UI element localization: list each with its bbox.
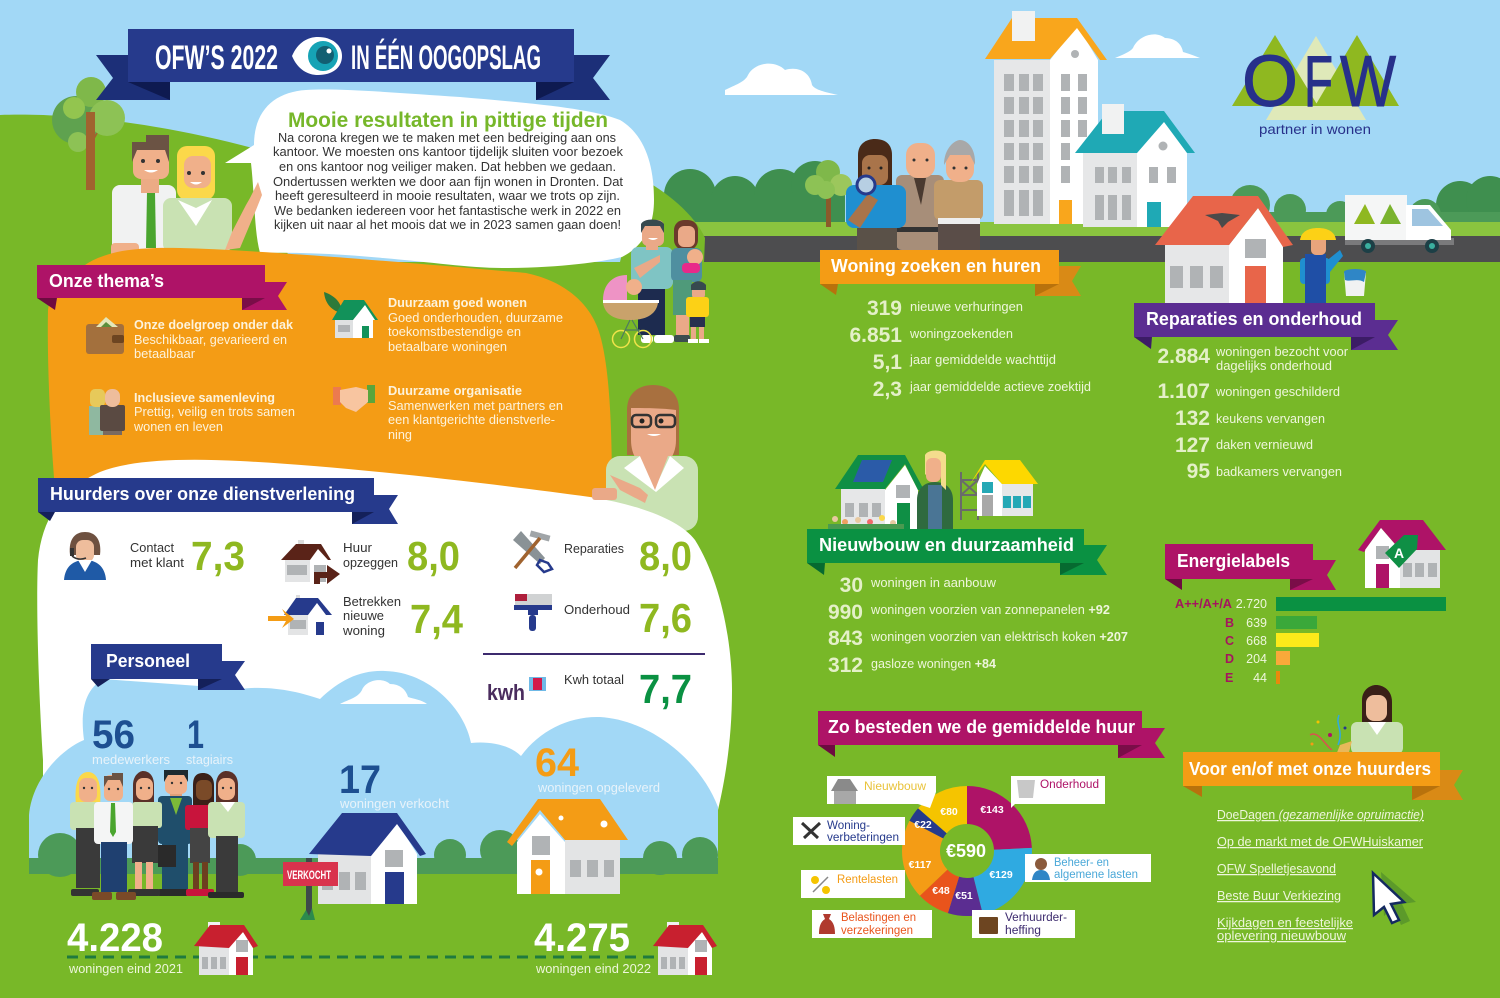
stat: woningen opgeleverd bbox=[535, 741, 660, 795]
stat: stagiairs: 1 bbox=[187, 713, 204, 757]
callout: Onderhoud bbox=[1011, 776, 1105, 808]
stat: stagiairs: stagiairs bbox=[186, 753, 233, 767]
text block: kijken uit naar al het moois dat we in 2023 samen gaan doen! bbox=[274, 218, 621, 232]
logo: OFW bbox=[1232, 35, 1399, 137]
panel: orange themes bbox=[48, 248, 612, 500]
theme: organisatie: Duurzame organisatie bbox=[388, 384, 522, 398]
chart: energy labels: 204 bbox=[1246, 652, 1267, 666]
icon: headset person bbox=[1032, 858, 1050, 880]
chart: energy labels: 2.720 bbox=[1236, 597, 1267, 611]
sign bbox=[283, 858, 338, 920]
theme: duurzaam wonen bbox=[324, 292, 563, 354]
stat: woningen opgeleverd: 64 bbox=[535, 741, 580, 785]
donut chart: rent spending: €80 bbox=[940, 806, 958, 818]
theme: organisatie: Samenwerken met partners en bbox=[388, 399, 563, 413]
illustration: woman with confetti bbox=[1310, 685, 1403, 756]
callout: Belastingen en verzekeringen: verzekeringen bbox=[841, 925, 913, 937]
score: onderhoud: 7,6 bbox=[639, 595, 692, 641]
stats: nieuwbouw: 30 bbox=[840, 574, 863, 597]
stats: woning zoeken: jaar gemiddelde wachttijd bbox=[909, 353, 1056, 367]
stat: woningen eind 2021: 4.228 bbox=[67, 916, 163, 960]
chart: energy labels: C bbox=[1225, 634, 1234, 648]
illustration: house under repair bbox=[1155, 196, 1293, 305]
stat: medewerkers: 56 bbox=[92, 713, 135, 757]
score: huur opzeggen bbox=[281, 533, 460, 584]
stat: medewerkers bbox=[92, 713, 170, 767]
stat: woningen eind 2021: woningen eind 2021 bbox=[68, 962, 183, 976]
stats: reparaties: 1.107 bbox=[1157, 380, 1210, 403]
text block: activities links bbox=[1217, 808, 1424, 943]
stats: reparaties: woningen bezocht voor bbox=[1215, 345, 1348, 359]
score: kwh totaal bbox=[483, 653, 705, 712]
illustration: new house bbox=[507, 799, 628, 894]
chart: energy labels: B bbox=[1225, 616, 1234, 630]
icon: house with entry arrow bbox=[268, 595, 332, 635]
icon: red house bbox=[194, 922, 258, 975]
text block: heeft geresulteerd in mooie resultaten, waar we trots op zijn. bbox=[275, 189, 620, 203]
stats: reparaties: keukens vervangen bbox=[1216, 412, 1325, 426]
stats: reparaties bbox=[1157, 345, 1348, 483]
callout: Woning-verbeteringen: Woning- bbox=[827, 820, 870, 832]
callout: Verhuurderheffing bbox=[972, 910, 1075, 938]
stats: woning zoeken: nieuwe verhuringen bbox=[910, 300, 1023, 314]
ribbon: Huurders over onze dienstverlening bbox=[38, 478, 398, 524]
theme: samenleving bbox=[89, 389, 295, 435]
cloud left bbox=[725, 64, 838, 95]
callout: Verhuurderheffing: heffing bbox=[1005, 925, 1041, 937]
callout: Onderhoud: Onderhoud bbox=[1040, 779, 1099, 791]
stats: nieuwbouw: gasloze woningen +84 bbox=[871, 657, 996, 671]
theme: duurzaam wonen: Goed onderhouden, duurzame bbox=[388, 311, 563, 325]
donut chart: rent spending bbox=[902, 786, 1032, 916]
callout: Rentelasten: Rentelasten bbox=[837, 874, 898, 886]
stat: woningen opgeleverd: woningen opgeleverd bbox=[537, 781, 660, 795]
banner: title bbox=[96, 29, 610, 100]
theme: duurzaam wonen: Duurzaam goed wonen bbox=[388, 296, 527, 310]
ribbon: Reparaties en onderhoud bbox=[1134, 303, 1398, 350]
stats: woning zoeken: 319 bbox=[867, 297, 902, 320]
theme: doelgroep bbox=[86, 317, 293, 361]
stat: woningen eind 2022 bbox=[534, 916, 717, 976]
text block: activities links: OFW Spelletjesavond bbox=[1217, 862, 1336, 876]
illustration: small tree bbox=[805, 160, 852, 227]
ribbon: Energielabels: Energielabels bbox=[1177, 551, 1290, 571]
logo: OFW: O bbox=[1242, 42, 1298, 122]
icon: house with A label bbox=[1358, 520, 1446, 588]
icon: handshake bbox=[333, 385, 375, 412]
stats: reparaties: dagelijks onderhoud bbox=[1216, 359, 1332, 373]
icon: kwh logo: kwh bbox=[487, 680, 525, 705]
theme: duurzaam wonen: toekomstbestendige en bbox=[388, 325, 521, 339]
text block: en ons kantoor nog veiliger maken. Dat hebben we gedaan. bbox=[279, 160, 616, 174]
logo: OFW: partner in wonen bbox=[1259, 121, 1371, 137]
stats: nieuwbouw: woningen voorzien van elektrisch koken +207 bbox=[870, 630, 1128, 644]
chart: energy labels: E bbox=[1225, 671, 1233, 685]
theme: organisatie bbox=[333, 384, 563, 442]
illustration: couple bbox=[111, 135, 262, 261]
text block: Ondertussen werkten we door aan fijn wonen in Dronten. Dat bbox=[273, 175, 624, 189]
donut chart: rent spending: €143 bbox=[980, 804, 1004, 816]
donut chart: rent spending: €129 bbox=[989, 869, 1013, 881]
illustration: van bbox=[1345, 195, 1454, 253]
donut chart: rent spending: €117 bbox=[909, 859, 932, 871]
panel: speech bubble bbox=[225, 90, 654, 268]
stats: nieuwbouw: 990 bbox=[828, 601, 863, 624]
donut chart: rent spending: €590 bbox=[946, 841, 986, 861]
text block: We bedanken iedereen voor het fantastische werk in 2022 en bbox=[274, 204, 621, 218]
icon: eye bbox=[292, 37, 342, 75]
ribbon: Voor en/of met onze huurders bbox=[1183, 752, 1463, 800]
stat: woningen eind 2021 bbox=[67, 916, 258, 976]
text block: activities links: Beste Buur Verkiezing bbox=[1217, 889, 1341, 903]
stats: nieuwbouw bbox=[828, 574, 1128, 677]
ribbon: Onze thema's bbox=[37, 265, 287, 310]
heading: Mooie resultaten in pittige tijden bbox=[288, 109, 608, 132]
ribbon: Nieuwbouw en duurzaamheid: Nieuwbouw en duurzaamheid bbox=[819, 535, 1074, 555]
stat: stagiairs bbox=[186, 713, 233, 767]
icon: fist on panel bbox=[592, 488, 617, 500]
ribbon: Woning zoeken en huren: Woning zoeken en huren bbox=[831, 256, 1041, 276]
ribbon: Zo besteden we de gemiddelde huur: Zo besteden we de gemiddelde huur bbox=[828, 717, 1135, 737]
theme: organisatie: een klantgerichte dienstverle- bbox=[388, 413, 555, 427]
score: reparaties: 8,0 bbox=[639, 533, 692, 579]
stats: nieuwbouw: 312 bbox=[828, 654, 863, 677]
ribbon: Personeel: Personeel bbox=[106, 651, 190, 671]
icon: mouse cursor bbox=[1373, 872, 1416, 925]
chart: energy labels: 44 bbox=[1253, 671, 1267, 685]
ribbon: Personeel bbox=[91, 644, 245, 690]
illustration: staff group bbox=[70, 770, 245, 900]
illustration: woman with glasses bbox=[606, 385, 698, 531]
illustration: sustainable houses bbox=[828, 450, 1038, 530]
title text right: IN ÉÉN OOGOPSLAG bbox=[351, 39, 541, 77]
text block: kantoor. We moesten ons kantoor tijdelijk sluiten voor bezoek bbox=[273, 145, 624, 159]
ribbon: Reparaties en onderhoud: Reparaties en onderhoud bbox=[1146, 309, 1362, 329]
theme: doelgroep: Onze doelgroep onder dak bbox=[134, 318, 293, 332]
icon: house with A label: A bbox=[1394, 545, 1404, 561]
callout: Beheer- en algemene lasten bbox=[1025, 854, 1151, 882]
score: onderhoud: Onderhoud bbox=[564, 603, 630, 617]
text block: activities links: DoeDagen (gezamenlijke opruimactie) bbox=[1217, 808, 1424, 822]
logo: OFW: F bbox=[1304, 42, 1333, 122]
stats: nieuwbouw: woningen in aanbouw bbox=[870, 576, 997, 590]
donut chart: rent spending: €51 bbox=[955, 890, 973, 902]
theme: duurzaam wonen: betaalbare woningen bbox=[388, 340, 507, 354]
score: contact met klant bbox=[64, 532, 245, 580]
icon: money bag bbox=[819, 914, 835, 934]
score: huur opzeggen: 8,0 bbox=[407, 533, 460, 579]
cloud right bbox=[1115, 34, 1200, 58]
ribbon: Huurders over onze dienstverlening: Huurders over onze dienstverlening bbox=[50, 484, 355, 504]
stats: reparaties: 127 bbox=[1175, 434, 1210, 457]
stats: woning zoeken bbox=[849, 297, 1091, 401]
ribbon: Woning zoeken en huren bbox=[820, 250, 1081, 296]
icon: house with exit arrow bbox=[281, 540, 340, 584]
text block: activities links: oplevering nieuwbouw bbox=[1217, 929, 1347, 943]
panel: personnel sky bbox=[29, 671, 718, 877]
title text left: OFW’S 2022 bbox=[155, 39, 278, 77]
text block: Na corona kregen we te maken met een bedreiging aan ons bbox=[278, 131, 616, 145]
score: kwh totaal: 7,7 bbox=[639, 666, 692, 712]
text block: activities links: Op de markt met de OFWHuiskamer bbox=[1217, 835, 1423, 849]
callout: Woning-verbeteringen: verbeteringen bbox=[827, 832, 899, 844]
callout: Belastingen en verzekeringen: Belastingen en bbox=[841, 912, 916, 924]
illustration: tall building bbox=[985, 11, 1107, 224]
score: contact met klant: Contact bbox=[130, 541, 175, 555]
score: contact met klant: met klant bbox=[130, 556, 185, 570]
icon: wallet bbox=[979, 917, 998, 934]
score: reparaties: Reparaties bbox=[564, 542, 624, 556]
callout: Belastingen en verzekeringen bbox=[812, 910, 932, 938]
icon: couple bbox=[89, 389, 125, 435]
callout: Nieuwbouw: Nieuwbouw bbox=[864, 781, 927, 793]
icon: paint brush bbox=[514, 594, 552, 631]
icon: percent coins bbox=[811, 876, 830, 894]
theme: samenleving: Inclusieve samenleving bbox=[134, 391, 275, 405]
stats: nieuwbouw: 843 bbox=[828, 627, 863, 650]
stat: woningen eind 2022: woningen eind 2022 bbox=[535, 962, 651, 976]
stat: woningen verkocht bbox=[339, 758, 450, 811]
icon: grey house bbox=[831, 779, 858, 804]
icon: paint can bbox=[1017, 780, 1035, 798]
callout: Beheer- en algemene lasten: algemene lasten bbox=[1054, 869, 1138, 881]
illustration: house seekers bbox=[846, 139, 983, 250]
theme: organisatie: ning bbox=[388, 428, 412, 442]
ribbon: Voor en/of met onze huurders: Voor en/of met onze huurders bbox=[1189, 759, 1431, 779]
icon: red house bbox=[653, 922, 717, 975]
score: betrekken nieuwe woning: nieuwe bbox=[343, 609, 384, 623]
score: betrekken nieuwe woning: Betrekken bbox=[343, 595, 401, 609]
callout: Nieuwbouw bbox=[827, 776, 936, 808]
stats: reparaties: 132 bbox=[1175, 407, 1210, 430]
logo: OFW: W bbox=[1340, 42, 1396, 122]
chart: energy labels: 668 bbox=[1246, 634, 1267, 648]
icon: headset woman bbox=[64, 532, 106, 580]
stats: reparaties: woningen geschilderd bbox=[1215, 385, 1340, 399]
score: betrekken nieuwe woning bbox=[268, 595, 463, 642]
donut chart: rent spending: €48 bbox=[932, 885, 950, 897]
stats: woning zoeken: jaar gemiddelde actieve zoektijd bbox=[909, 380, 1091, 394]
illustration: teal house bbox=[1075, 104, 1195, 227]
stats: woning zoeken: woningzoekenden bbox=[909, 327, 1013, 341]
illustration: family bbox=[603, 220, 709, 348]
stat: woningen eind 2022: 4.275 bbox=[534, 916, 630, 960]
text block bbox=[273, 131, 624, 232]
stat: medewerkers: medewerkers bbox=[92, 753, 170, 767]
score: contact met klant: 7,3 bbox=[191, 533, 245, 579]
score: kwh totaal: Kwh totaal bbox=[564, 673, 624, 687]
text block: activities links: Kijkdagen en feestelijke bbox=[1217, 916, 1353, 930]
callout: Beheer- en algemene lasten: Beheer- en bbox=[1054, 857, 1109, 869]
ribbon: Onze thema's: Onze thema’s bbox=[49, 271, 164, 291]
icon: kwh logo bbox=[487, 677, 546, 705]
stat: woningen verkocht: woningen verkocht bbox=[339, 797, 450, 811]
stats: reparaties: 95 bbox=[1187, 460, 1210, 483]
score: huur opzeggen: opzeggen bbox=[343, 556, 398, 570]
ribbon: Energielabels bbox=[1165, 544, 1336, 590]
stats: reparaties: badkamers vervangen bbox=[1216, 465, 1342, 479]
icon: green house with leaf bbox=[324, 292, 378, 338]
stats: reparaties: daken vernieuwd bbox=[1216, 438, 1313, 452]
stats: woning zoeken: 6.851 bbox=[849, 324, 902, 347]
stats: nieuwbouw: woningen voorzien van zonnepanelen +92 bbox=[870, 603, 1110, 617]
theme: samenleving: wonen en leven bbox=[133, 420, 223, 434]
callout: Rentelasten bbox=[801, 870, 905, 898]
callout: Verhuurderheffing: Verhuurder- bbox=[1005, 912, 1067, 924]
theme: samenleving: Prettig, veilig en trots samen bbox=[134, 405, 295, 419]
ribbon: Zo besteden we de gemiddelde huur bbox=[818, 711, 1165, 758]
score: betrekken nieuwe woning: woning bbox=[342, 624, 385, 638]
tree left bbox=[52, 77, 125, 190]
stats: reparaties: 2.884 bbox=[1157, 345, 1210, 368]
stat: woningen verkocht: 17 bbox=[339, 758, 381, 802]
donut chart: rent spending: €22 bbox=[914, 819, 932, 831]
chart: energy labels bbox=[1175, 597, 1446, 685]
stats: woning zoeken: 2,3 bbox=[873, 378, 902, 401]
icon: wallet bbox=[86, 317, 124, 354]
theme: doelgroep: Beschikbaar, gevarieerd en bbox=[134, 333, 287, 347]
sign: VERKOCHT bbox=[287, 868, 331, 882]
illustration: sold house with sign bbox=[283, 813, 426, 920]
stats: woning zoeken: 5,1 bbox=[873, 351, 902, 374]
callout: Woning-verbeteringen bbox=[793, 817, 905, 845]
dashed line timeline bbox=[67, 956, 654, 958]
chart: energy labels: A++/A+/A bbox=[1175, 597, 1232, 611]
icon: saw and hammer bbox=[513, 531, 552, 572]
chart: energy labels: D bbox=[1225, 652, 1234, 666]
ribbon: Nieuwbouw en duurzaamheid bbox=[807, 529, 1107, 575]
cloud inside panel bbox=[340, 680, 427, 704]
score: huur opzeggen: Huur bbox=[343, 541, 372, 555]
score: reparaties bbox=[513, 531, 692, 579]
theme: doelgroep: betaalbaar bbox=[134, 347, 195, 361]
icon: tools bbox=[802, 823, 820, 838]
illustration: worker with paint bucket bbox=[1300, 228, 1366, 304]
score: betrekken nieuwe woning: 7,4 bbox=[410, 596, 463, 642]
panel: white service panel bbox=[37, 460, 732, 810]
chart: energy labels: 639 bbox=[1246, 616, 1267, 630]
score: onderhoud bbox=[514, 594, 692, 641]
